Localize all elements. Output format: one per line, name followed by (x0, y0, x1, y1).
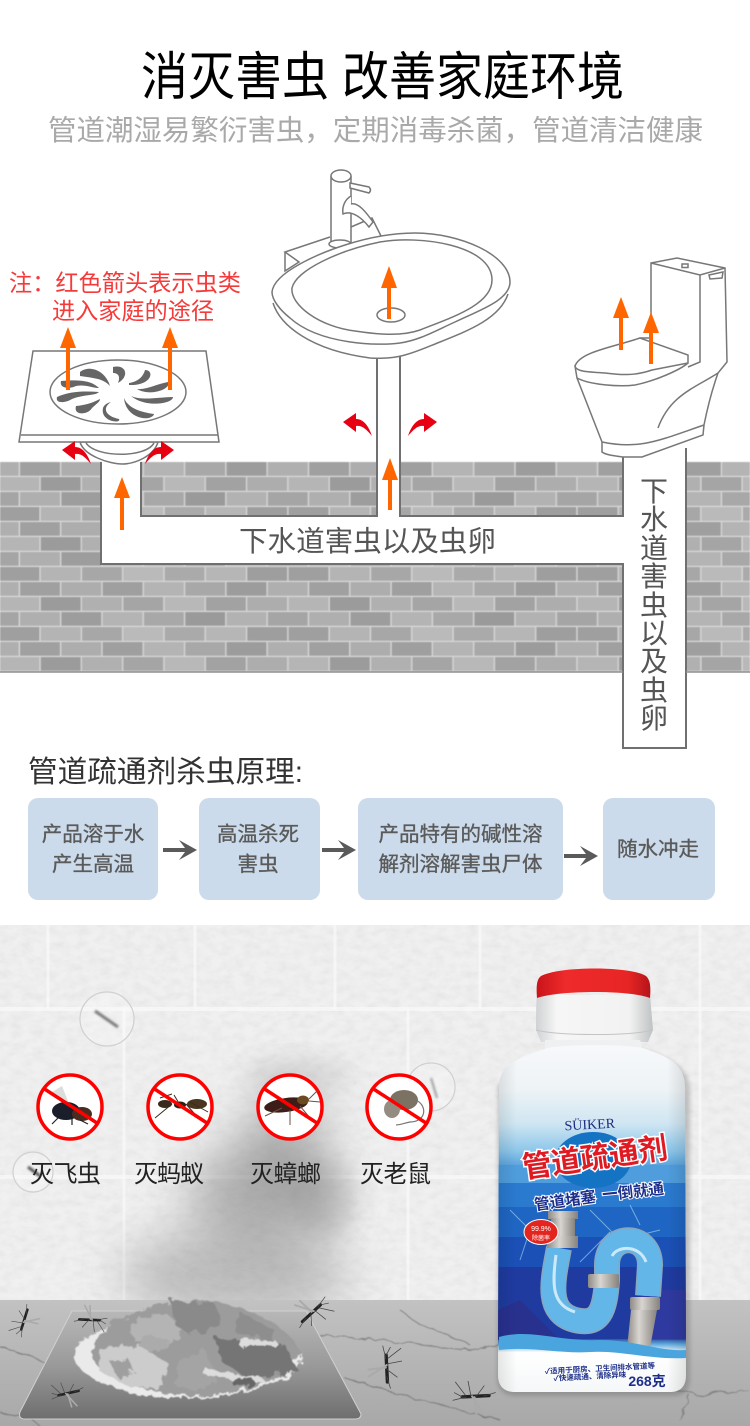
step 4 box: 随水冲走 (617, 838, 699, 861)
step 3 box: 解剂溶解害虫尸体 (378, 853, 542, 876)
pest labels (30, 1161, 431, 1188)
step 1 box (28, 798, 158, 900)
product name: 管道疏通剂 (520, 1132, 670, 1185)
bottle shadow (497, 1047, 690, 1396)
brand name: SÜIKER (564, 1115, 616, 1134)
mosquitoes (5, 1291, 497, 1418)
marble floor (0, 1300, 750, 1426)
note: red arrows legend: 进入家庭的途径 (52, 298, 214, 324)
tiled wall background (0, 925, 750, 1305)
arrow 3 (564, 846, 598, 866)
blue label panels and water caustics (498, 1062, 686, 1392)
pest labels: 灭飞虫 (30, 1161, 101, 1188)
step 1 box: 产生高温 (52, 853, 134, 876)
pest labels: 灭老鼠 (360, 1161, 431, 1188)
toilet fixture (575, 258, 727, 457)
pest labels: 灭蚂蚁 (134, 1161, 204, 1188)
floating bubbles with insects (13, 992, 455, 1192)
usage text: ✓适用于厨房、卫生间排水管道等 (544, 1360, 656, 1376)
arrow 1 (163, 840, 197, 860)
title: 消灭害虫 改善家庭环境 (141, 49, 624, 107)
note: red arrows legend: 注：红色箭头表示虫类 (9, 270, 241, 296)
pipe label vertical: 道 (640, 533, 668, 564)
99.9% badge: 除菌率 (532, 1234, 550, 1242)
pipe label vertical: 虫 (640, 590, 668, 621)
step 3 box: 产品特有的碱性溶 (378, 823, 542, 846)
usage text: ✓快速疏通、清除异味 (553, 1369, 627, 1383)
bottle body (498, 1045, 686, 1392)
usage text (544, 1360, 656, 1383)
drain pipes (0, 350, 750, 748)
brick wall (0, 462, 750, 672)
tagline: 一倒就通 (601, 1179, 665, 1204)
arrow 2 (322, 840, 356, 860)
pipe label vertical: 以 (640, 618, 668, 649)
brand ellipse (555, 1132, 631, 1188)
bottle cap (536, 968, 653, 1052)
step 2 box (199, 798, 320, 900)
step 4 box (603, 798, 715, 900)
drain grate blades (57, 367, 173, 421)
pest labels: 灭蟑螂 (250, 1161, 321, 1188)
wave band (499, 1334, 686, 1358)
tagline (533, 1179, 665, 1214)
no-mouse icon (367, 1075, 431, 1139)
pipe label vertical: 虫 (640, 675, 668, 706)
pipe label horizontal: 下水道害虫以及虫卵 (239, 526, 496, 558)
99.9% badge (524, 1220, 558, 1244)
tagline: 管道堵塞 (533, 1187, 598, 1214)
step 2 box: 高温杀死 (217, 823, 299, 846)
pipe label vertical: 卵 (640, 703, 668, 734)
sink fixture (272, 170, 510, 358)
section heading: principle: 管道疏通剂杀虫原理: (28, 756, 303, 789)
pipe label vertical: 下 (640, 476, 668, 507)
pipe label vertical (640, 476, 668, 734)
pipe label vertical: 害 (640, 561, 668, 592)
no-cockroach icon (258, 1075, 322, 1139)
grate with debris (75, 1300, 301, 1398)
floor drain fixture (19, 351, 219, 464)
99.9% badge: 99.9% (531, 1226, 551, 1233)
S-trap pipe illustration (547, 1211, 660, 1348)
orange arrows: insect paths (60, 266, 659, 530)
floor drain photo (20, 1300, 361, 1419)
net weight: 268克 (628, 1373, 666, 1389)
note: red arrows legend (9, 270, 241, 324)
step 1 box: 产品溶于水 (42, 823, 144, 846)
step 3 box (358, 798, 563, 900)
no-ant icon (148, 1075, 212, 1139)
pipe label vertical: 水 (640, 504, 668, 535)
no-fly icon (38, 1075, 102, 1139)
subtitle: 管道潮湿易繁衍害虫，定期消毒杀菌，管道清洁健康 (48, 115, 703, 147)
product bottle (490, 968, 695, 1396)
dark smoke (120, 1057, 355, 1320)
step 2 box: 害虫 (238, 853, 278, 876)
pipe label vertical: 及 (640, 646, 668, 677)
red curved arrows (62, 413, 437, 464)
